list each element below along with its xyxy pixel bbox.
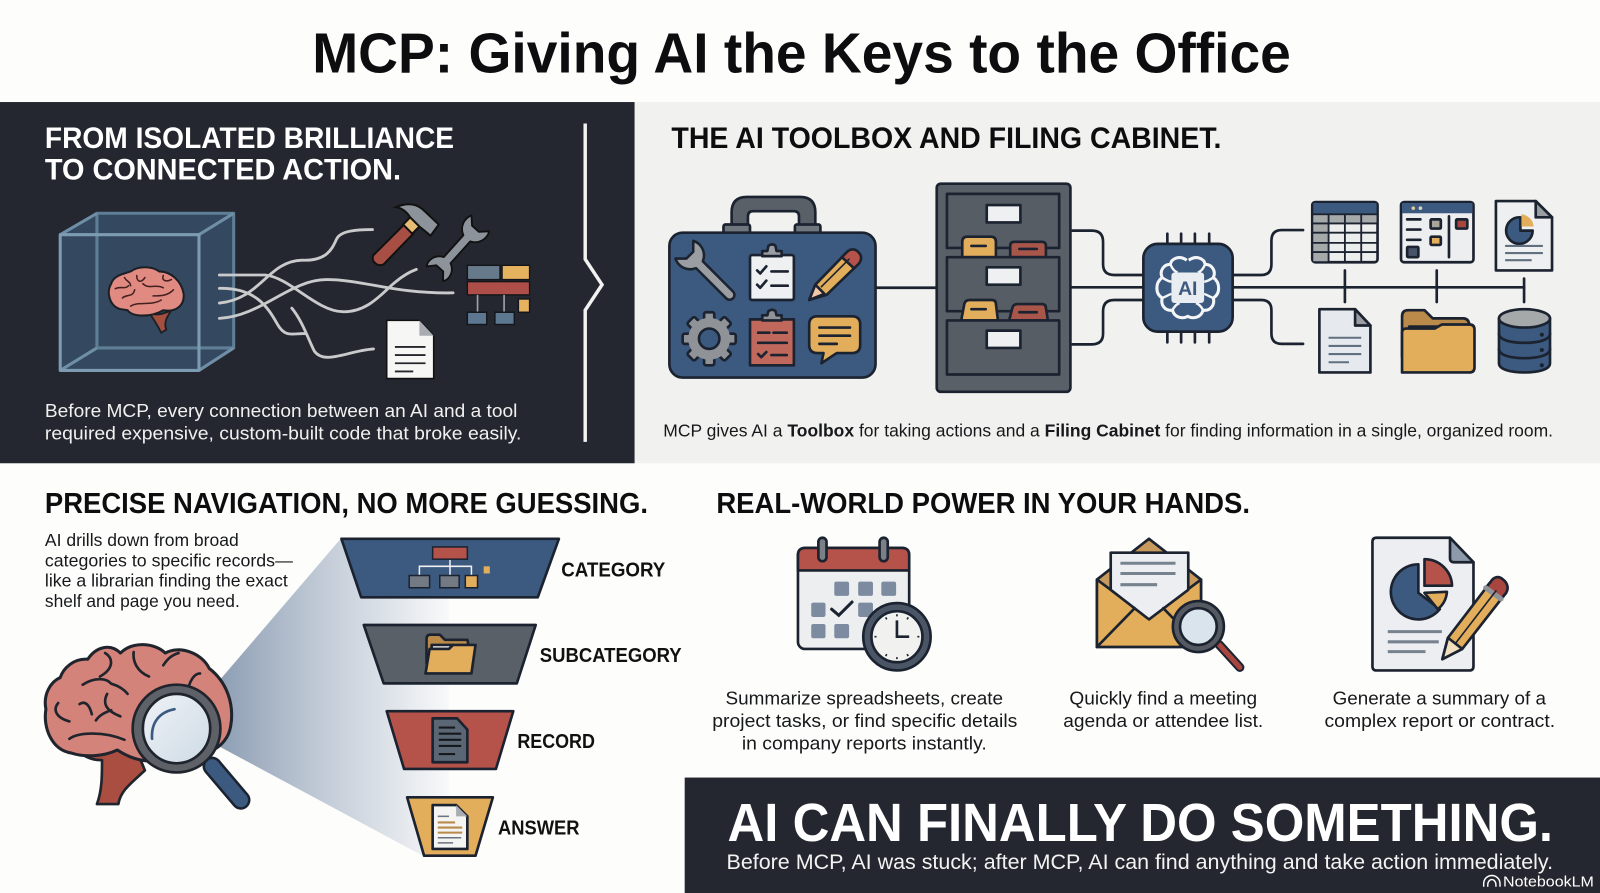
text: before MCP: required expensive, custom-built code that broke easily. [45, 422, 521, 443]
panel: precise navigation [45, 488, 682, 856]
banner heading: AI CAN FINALLY DO SOMETHING. [728, 793, 1553, 853]
tool: gear [683, 312, 736, 365]
icon: kanban board [1401, 202, 1473, 262]
panel: real-world power [712, 488, 1555, 753]
funnel level: answer [407, 797, 580, 856]
icon: envelope with magnifier [1097, 539, 1240, 667]
icon: hammer [373, 204, 439, 265]
title: MCP: Giving AI the Keys to the Office [312, 21, 1291, 84]
icon: folder [426, 635, 476, 673]
drawer 2 [947, 257, 1059, 311]
text: meeting agenda: agenda or attendee list. [1063, 710, 1263, 731]
icon: folder [1402, 310, 1474, 372]
tool: speech bubble [809, 316, 860, 363]
text: report summary: Generate a summary of a [1333, 688, 1547, 709]
tool: red clipboard [750, 310, 794, 365]
text: spreadsheets: Summarize spreadsheets, create [726, 688, 1003, 709]
heading: precise navigation: PRECISE NAVIGATION, NO MORE GUESSING. [45, 488, 648, 520]
logo: NotebookLM: NotebookLM [1503, 875, 1594, 891]
icon: hierarchy [409, 547, 490, 588]
text: spreadsheets [712, 688, 1017, 753]
text: report summary [1324, 688, 1555, 731]
icon: calendar and clock [798, 538, 931, 670]
text: meeting agenda: Quickly find a meeting [1069, 688, 1257, 709]
text: drill down [45, 530, 293, 611]
icon: toolbox [669, 197, 876, 378]
label: category: CATEGORY [561, 560, 665, 582]
icon: database [1499, 309, 1550, 372]
icon: pie report [1496, 201, 1552, 270]
label: record: RECORD [517, 731, 595, 753]
heading: from isolated brilliance: TO CONNECTED ACTION. [45, 154, 401, 187]
icon: brain in cube [109, 267, 184, 333]
text: drill down: categories to specific records— [45, 550, 293, 570]
caption: toolbox: MCP gives AI a Toolbox for taking actions and a Filing Cabinet for finding information in a single, organized room. [663, 421, 1553, 441]
tabs 1 [962, 237, 1046, 257]
tangled custom connections [219, 230, 453, 357]
heading: from isolated brilliance: FROM ISOLATED BRILLIANCE [45, 122, 454, 155]
text: before MCP [45, 400, 521, 443]
text: drill down: shelf and page you need. [45, 591, 240, 611]
label: answer: ANSWER [498, 818, 580, 840]
drawer 3 [947, 320, 1059, 374]
drawer 1 [947, 194, 1059, 248]
magnifier [133, 685, 241, 800]
connection lines [876, 230, 1524, 344]
icon: document [387, 320, 434, 379]
funnel level: record [387, 711, 595, 769]
text: report summary: complex report or contract. [1324, 710, 1555, 731]
tool: pencil [809, 249, 861, 300]
chevron divider [585, 123, 602, 442]
panel: toolbox and filing cabinet [635, 102, 1600, 463]
icon: filing cabinet [937, 184, 1070, 392]
text: spreadsheets: project tasks, or find specific details [712, 710, 1017, 731]
text: drill down: like a librarian finding the exact [45, 571, 288, 591]
icon: brain with magnifier [45, 645, 241, 804]
tabs 2 [961, 300, 1048, 320]
label: subcategory: SUBCATEGORY [540, 645, 682, 667]
icon: org blocks [467, 265, 530, 324]
heading: from isolated brilliance [45, 122, 454, 187]
text: before MCP: Before MCP, every connection between an AI and a tool [45, 400, 517, 421]
tool: checklist clipboard [750, 244, 794, 300]
icon: AI chip: AI [1178, 278, 1197, 300]
icon: record document [433, 718, 467, 762]
heading: real-world power: REAL-WORLD POWER IN YOUR HANDS. [716, 488, 1250, 520]
text: spreadsheets: in company reports instantly. [742, 732, 987, 753]
funnel level: category [341, 539, 665, 597]
icon: document [1319, 309, 1370, 372]
icon: AI chip [1143, 234, 1233, 342]
banner: AI can finally do something [685, 778, 1600, 893]
glass cube [60, 213, 234, 370]
panel: isolated brilliance [0, 102, 635, 463]
banner subline: Before MCP, AI was stuck; after MCP, AI can find anything and take action immediately. [727, 851, 1553, 874]
funnel level: subcategory [364, 625, 682, 683]
text: drill down: AI drills down from broad [45, 530, 239, 550]
heading: toolbox: THE AI TOOLBOX AND FILING CABINET. [671, 122, 1221, 155]
text: meeting agenda [1063, 688, 1263, 731]
icon: report with pencil [1372, 538, 1508, 670]
icon: wrench [425, 214, 490, 283]
tool: wrench [674, 240, 743, 308]
icon: spreadsheet [1312, 202, 1378, 262]
icon: answer document [433, 805, 467, 849]
search beam [216, 540, 449, 855]
